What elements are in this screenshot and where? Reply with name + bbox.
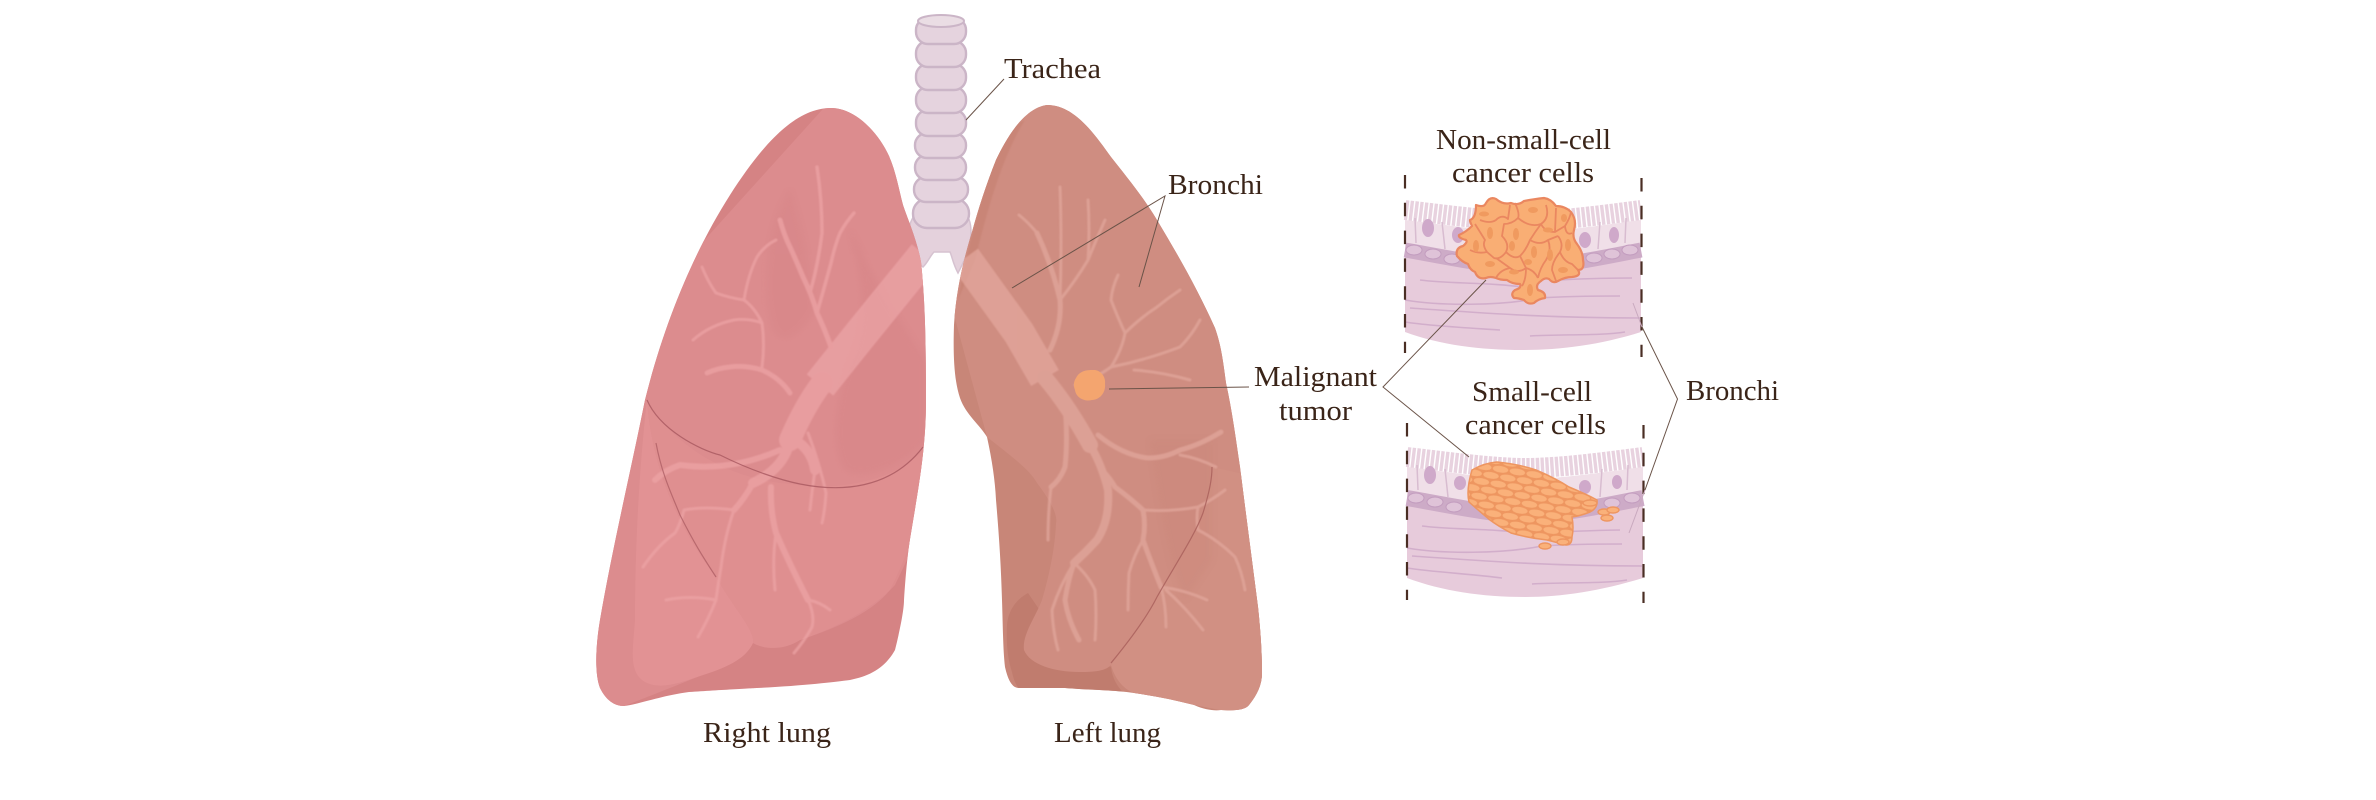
left lung bottom shadow xyxy=(1007,593,1125,694)
label: Malignant tumor xyxy=(1254,361,1377,427)
label: Bronchi on sections: Bronchi xyxy=(1686,375,1779,407)
label: Trachea: Trachea xyxy=(1004,53,1101,85)
label: Non-small-cell cancer cells: Non-small-cell xyxy=(1436,124,1611,156)
label: Non-small-cell cancer cells xyxy=(1436,124,1611,189)
dashed section lines xyxy=(1405,175,1642,357)
leader lines xyxy=(966,79,1678,533)
label: Small-cell cancer cells xyxy=(1465,376,1606,441)
panel: small-cell bronchi section xyxy=(1407,423,1644,603)
infographic: lungs and cancer cell types xyxy=(596,14,1778,748)
right lung bronchial tree xyxy=(643,167,925,653)
small-cell cancer cluster xyxy=(1468,462,1619,549)
label: Left lung: Left lung xyxy=(1054,717,1161,749)
right lung fissures xyxy=(647,400,923,577)
panel: non-small-cell bronchi section xyxy=(1405,175,1642,357)
label: Small-cell cancer cells: cancer cells xyxy=(1465,409,1606,441)
right lung darker patches xyxy=(836,230,926,474)
label: Bronchi on lung: Bronchi xyxy=(1168,169,1263,201)
right lung xyxy=(596,108,926,706)
label: Malignant tumor: Malignant xyxy=(1254,361,1377,393)
bronchus tissue xyxy=(1405,210,1641,350)
bronchus tissue xyxy=(1407,457,1643,597)
trachea xyxy=(909,15,971,273)
label: Non-small-cell cancer cells: cancer cells xyxy=(1452,157,1594,189)
left lung front lobes xyxy=(954,105,1262,710)
right lung front lobes xyxy=(596,108,926,706)
tumor in left lung xyxy=(1074,370,1105,401)
left lung xyxy=(954,105,1262,710)
label: Small-cell cancer cells: Small-cell xyxy=(1472,376,1592,408)
label: Right lung: Right lung xyxy=(703,717,831,749)
non-small-cell cancer cluster xyxy=(1457,198,1583,304)
label: Malignant tumor: tumor xyxy=(1279,395,1352,427)
left lung fissure xyxy=(1111,467,1212,663)
left lung bronchial tree xyxy=(965,187,1245,650)
dashed section lines xyxy=(1407,423,1644,603)
